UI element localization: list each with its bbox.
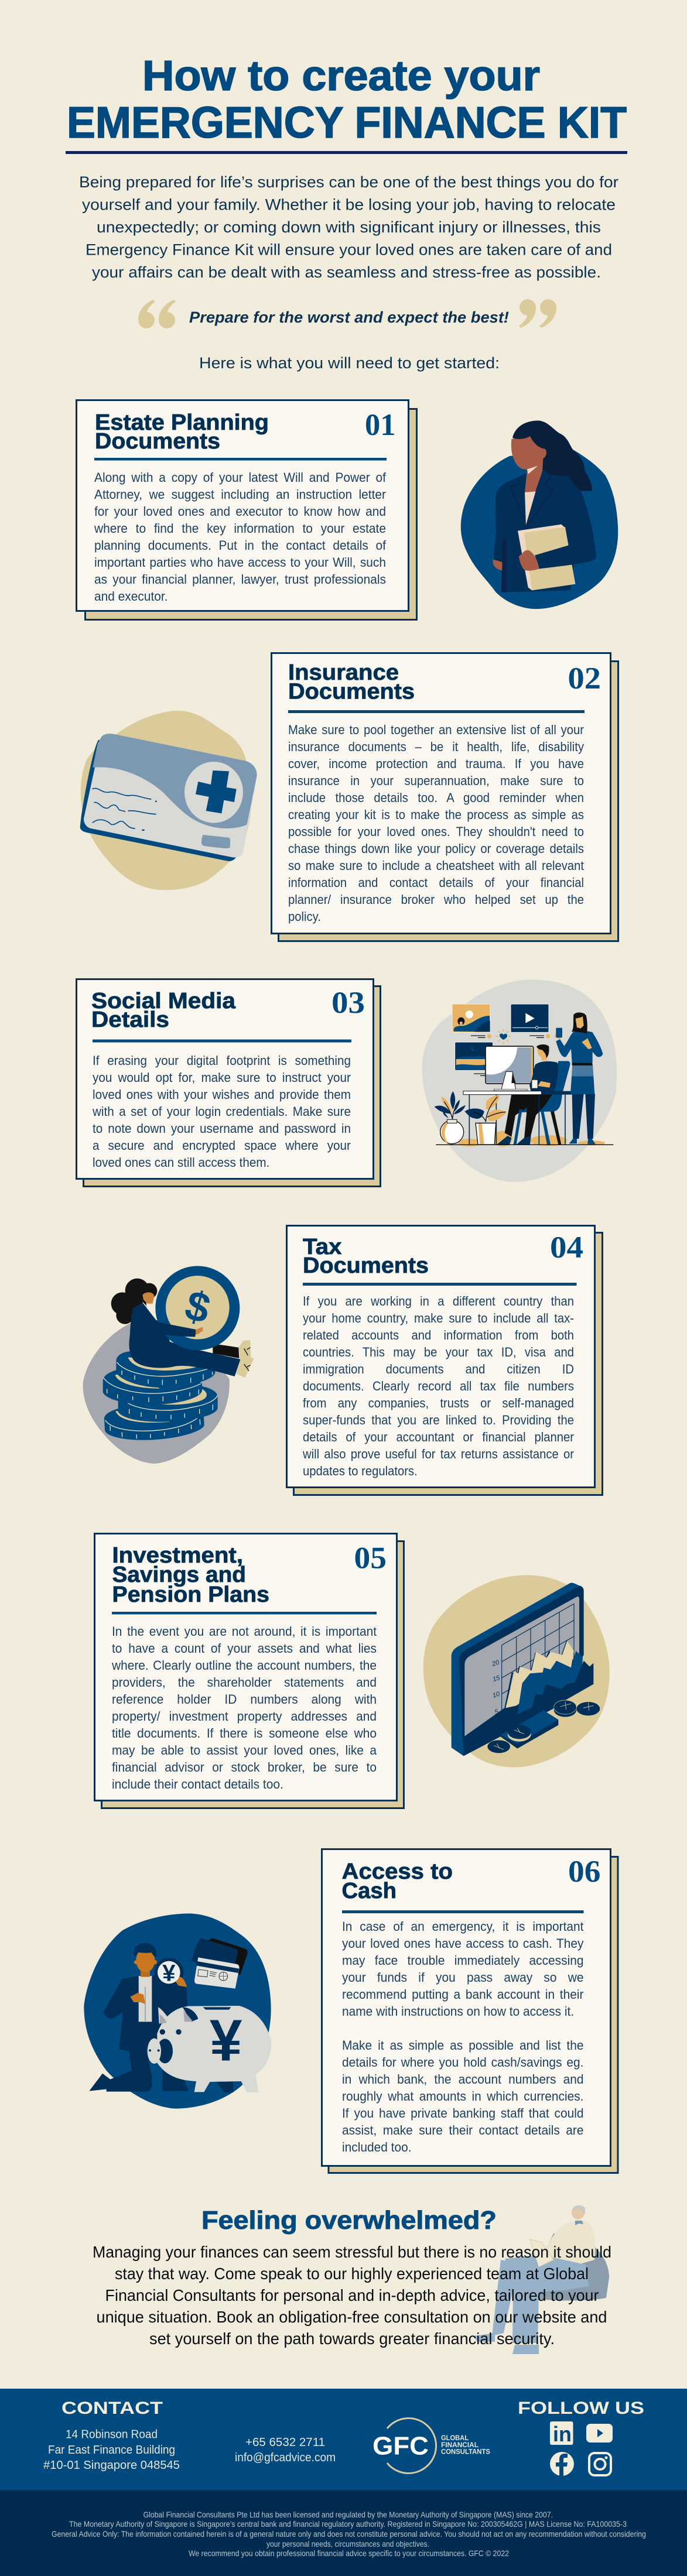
heading: tax documents: Documents — [303, 1253, 429, 1278]
illustration: stock chart monitor with coins — [423, 1575, 610, 1767]
text: insurance body: planner/ insurance broker who helped set up the — [288, 892, 584, 907]
text: access to cash body: details for where you hold cash/savings eg. — [342, 2055, 583, 2070]
arm — [134, 1308, 196, 1337]
text: tax body: updates to regulators. — [303, 1464, 418, 1478]
text: tax body — [303, 1294, 574, 1478]
intro paragraph: Emergency Finance Kit will ensure your loved ones are taken care of and — [86, 241, 612, 259]
text: investment body: include their contact details too. — [112, 1777, 283, 1791]
text: estate planning body: and executor. — [94, 589, 168, 604]
text: investment body: may be able to assist your loved ones, like a — [112, 1743, 377, 1758]
text: estate planning body: where to find the key information to your estate — [94, 521, 386, 536]
text: social media body: you would opt for, make sure to instruct your — [93, 1070, 351, 1084]
illustration: seated older man reading (faded) — [473, 2205, 609, 2354]
intro paragraph: unexpectedly; or coming down with significant injury or illnesses, this — [97, 218, 601, 236]
title: EMERGENCY FINANCE KIT — [67, 98, 627, 147]
text: estate planning body — [94, 470, 386, 604]
heading: insurance documents: Documents — [288, 679, 415, 704]
illustration: health insurance card — [80, 711, 257, 890]
text: insurance body: possible for your loved ones. They shouldn't need to — [288, 824, 584, 839]
heading: insurance documents — [288, 660, 415, 704]
closing paragraph: set yourself on the path towards greater financial security. — [149, 2330, 555, 2348]
footer: address: 14 Robinson Road — [66, 2428, 158, 2441]
text: insurance body — [288, 722, 584, 924]
heading: access to cash: Cash — [342, 1879, 397, 1903]
heading: investment savings and pension plans: Investment, — [112, 1543, 243, 1568]
heading: feeling overwhelmed: Feeling overwhelmed? — [201, 2206, 497, 2235]
text: tax body: your home country, make sure to include all tax- — [303, 1311, 574, 1325]
text: insurance body: information and contact details of your financial — [288, 875, 584, 890]
number 01: 01 — [365, 408, 396, 442]
text: insurance body: Make sure to pool together an extensive list of all your — [288, 722, 584, 737]
subheading: what you will need: Here is what you will need to get started: — [199, 354, 500, 372]
plants — [435, 1091, 507, 1145]
desk — [463, 1089, 572, 1145]
title — [67, 53, 627, 147]
monitor: 20 — [491, 1659, 501, 1668]
text: tax body: will also prove useful for tax returns assistance or — [303, 1447, 574, 1461]
illustration: businesswoman holding folder — [461, 420, 618, 609]
text: tax body: documents. Clearly record all tax file numbers — [303, 1379, 574, 1393]
footer: legal band: We recommend you obtain professional financial advice specific to your circumstances. GFC © 2022 — [189, 2548, 509, 2558]
number 05: 05 — [354, 1541, 387, 1575]
footer: address — [43, 2428, 180, 2472]
text: estate planning body: as your financial planner, lawyer, trust professionals — [94, 572, 386, 587]
text: tax body: countries. This may be your tax ID, visa and — [303, 1345, 574, 1359]
heading: tax documents — [303, 1235, 429, 1278]
text: estate planning body: Along with a copy of your latest Will and Power of — [94, 470, 386, 485]
icon: Facebook — [550, 2452, 574, 2476]
text: social media body: If erasing your digital footprint is something — [93, 1053, 351, 1068]
text: social media body — [93, 1053, 351, 1170]
footer: phone and email: +65 6532 2711 — [245, 2436, 325, 2449]
icon: closing quote mark — [519, 299, 556, 328]
monitor — [452, 1582, 584, 1756]
logo: GFC: FINANCIAL — [441, 2442, 478, 2449]
yen coin — [158, 1960, 180, 1986]
footer: legal band: your personal needs, circumstances and objectives. — [266, 2539, 429, 2548]
coins — [487, 1700, 600, 1753]
intro paragraph: your affairs can be dealt with as seamless and stress-free as possible. — [92, 263, 601, 281]
logo: GFC: CONSULTANTS — [441, 2448, 490, 2455]
text: investment body: reference holder ID numbers along with — [112, 1692, 377, 1707]
computer monitor — [486, 1046, 534, 1090]
text: insurance body: chase things down like your policy or coverage details — [288, 841, 584, 856]
text: tax body: immigration documents and citizen ID — [303, 1362, 574, 1376]
text: social media body: loved ones can still access them. — [93, 1155, 269, 1170]
text: estate planning body: for your loved ones and executor to know how and — [94, 504, 386, 519]
title: How to create your — [142, 53, 540, 100]
big dollar coin — [155, 1266, 240, 1350]
text: tax body: from any companies, trusts or self-managed — [303, 1396, 574, 1410]
text: investment body: to have a count of your assets and what lies — [112, 1641, 377, 1656]
text: insurance body: so make sure to include a cheatsheet with all relevant — [288, 858, 584, 873]
text: investment body: property/ investment property addresses and — [112, 1709, 377, 1724]
panel: 06 access to cash — [321, 1848, 618, 2174]
intro paragraph — [79, 173, 618, 281]
closing paragraph: stay that way. Come speak to our highly experienced team at Global — [115, 2265, 589, 2283]
third coin — [118, 1383, 218, 1422]
text: insurance body: include those details too. A good reminder when — [288, 790, 584, 805]
closing paragraph: Managing your finances can seem stressful but there is no reason it should — [93, 2243, 611, 2261]
heading: investment savings and pension plans — [112, 1543, 269, 1607]
panel: 01 estate planning documents — [76, 399, 418, 621]
footer: legal band: Global Financial Consultants Pte Ltd has been licensed and regulated by the Monetary Authority of Singapore (MAS) since 2007. — [143, 2510, 553, 2519]
text: social media body: with a set of your login credentials. Make sure — [93, 1104, 351, 1118]
text: access to cash body: your funds if you pass away so we — [342, 1970, 583, 1985]
second coin — [103, 1368, 202, 1405]
text: investment body: financial advisor or stock broker, be sure to — [112, 1760, 377, 1775]
man — [89, 1943, 233, 2092]
heading: social media details: Social Media — [91, 989, 236, 1013]
footer: address: Far East Finance Building — [48, 2444, 175, 2457]
stand — [501, 1711, 558, 1749]
trouser and leg — [213, 1344, 239, 1358]
text: access to cash body — [342, 1919, 583, 2154]
intro paragraph: Being prepared for life’s surprises can be one of the best things you do for — [79, 173, 618, 191]
icon: YouTube — [586, 2424, 613, 2443]
bottom coin — [104, 1400, 205, 1442]
heading: investment savings and pension plans: Savings and — [112, 1563, 246, 1587]
text: access to cash body: in which bank, the account numbers and — [342, 2072, 583, 2087]
heading: estate planning documents — [95, 410, 269, 454]
text: insurance body: policy. — [288, 909, 321, 924]
text: access to cash body: assist, make sure their contact details are — [342, 2123, 583, 2137]
top coin — [116, 1351, 215, 1388]
text: access to cash body: your loved ones have access to cash. They — [342, 1936, 583, 1951]
panel: 05 investment savings and pension plans — [94, 1533, 405, 1809]
video post — [511, 1004, 549, 1032]
heading: estate planning documents: Documents — [95, 429, 220, 454]
heading: tax documents: Tax — [303, 1235, 342, 1259]
text: investment body: where. Clearly outline the account numbers, the — [112, 1658, 377, 1673]
text: access to cash body: roughly what amounts in which currencies. — [342, 2089, 583, 2104]
text: investment body: In the event you are not around, it is important — [112, 1624, 377, 1639]
illustration: woman hugging dollar coin on coin stack: $ — [180, 1282, 215, 1332]
night post — [455, 1042, 493, 1070]
text: access to cash body: If you have private banking staff that could — [342, 2106, 583, 2121]
text: estate planning body: planning documents. Put in the contact details of — [94, 538, 386, 553]
logo: GFC: GFC — [372, 2432, 429, 2461]
panel: 04 tax documents — [286, 1225, 603, 1496]
illustration: woman hugging dollar coin on coin stack — [83, 1266, 254, 1464]
monitor: 10 — [492, 1690, 501, 1700]
chart areas — [505, 1641, 593, 1719]
closing paragraph: Financial Consultants for personal and in-depth advice, tailored to your — [105, 2286, 599, 2304]
closing paragraph — [93, 2243, 611, 2348]
text: insurance body: insurance documents – be it health, life, disability — [288, 739, 584, 754]
heading: insurance documents: Insurance — [288, 660, 399, 685]
text: insurance body: creating your kit is to make the process as simple as — [288, 807, 584, 822]
callout: prepare for the worst: Prepare for the worst and expect the best! — [189, 309, 509, 326]
number 04: 04 — [550, 1231, 583, 1265]
number 03: 03 — [331, 986, 365, 1020]
seated man — [497, 1044, 570, 1145]
icon: opening quote mark — [138, 300, 176, 328]
heading: social media details: Details — [91, 1008, 169, 1032]
text: social media body: a secure and encrypted space where your — [93, 1138, 351, 1152]
text: investment body: title documents. If there is someone else who — [112, 1726, 377, 1741]
text: estate planning body: Attorney, we suggest including an instruction letter — [94, 487, 386, 502]
footer: phone and email: info@gfcadvice.com — [235, 2451, 336, 2464]
text: access to cash body: name with instructions on how to access it. — [342, 2004, 574, 2019]
footer: phone and email — [235, 2436, 336, 2464]
text: investment body — [112, 1624, 377, 1791]
text: insurance body: cover, income protection and trauma. If you have — [288, 756, 584, 771]
heading: investment savings and pension plans: Pension Plans — [112, 1582, 269, 1607]
text: access to cash body: may face trouble immediately accessing — [342, 1953, 583, 1968]
text: tax body: super-funds that you are linked to. Providing the — [303, 1413, 574, 1427]
monitor: 15 — [492, 1674, 501, 1683]
standing woman — [555, 1012, 603, 1144]
text: investment body: providers, the shareholder statements and — [112, 1675, 377, 1690]
logo: GFC: GLOBAL — [441, 2435, 469, 2442]
photo post — [452, 1004, 490, 1032]
number 06: 06 — [568, 1855, 601, 1889]
panel: 03 social media details — [76, 978, 381, 1187]
illustration: couple at desk with social media posts — [422, 979, 617, 1182]
heading: access to cash — [342, 1859, 453, 1903]
text: tax body: details of your accountant or financial planner — [303, 1430, 574, 1444]
number 02: 02 — [568, 662, 601, 696]
text: tax body: If you are working in a different country than — [303, 1294, 574, 1308]
heading: access to cash: Access to — [342, 1859, 453, 1884]
icon: LinkedIn: in — [553, 2422, 572, 2446]
text: access to cash body: Make it as simple as possible and list the — [342, 2038, 583, 2053]
piggy bank: ¥ — [210, 2008, 242, 2073]
footer: legal band — [0, 2490, 687, 2576]
black hair — [111, 1279, 157, 1324]
footer: address: #10-01 Singapore 048545 — [43, 2459, 180, 2472]
heading: social media details — [91, 989, 236, 1032]
bank cards — [192, 1938, 248, 1989]
panel: 02 insurance documents — [271, 652, 619, 942]
text: insurance body: insurance in your superannuation, make sure to — [288, 773, 584, 788]
closing paragraph: unique situation. Book an obligation-free consultation on our website and — [96, 2308, 607, 2326]
footer: contact band — [0, 2389, 687, 2490]
logo: GFC — [372, 2418, 490, 2474]
text: access to cash body: included too. — [342, 2140, 412, 2154]
piggy bank — [148, 2006, 271, 2092]
text: access to cash body: recommend putting a bank account in their — [342, 1987, 583, 2002]
text: social media body: loved ones with your wishes and provide them — [93, 1087, 351, 1102]
yen coin: ¥ — [162, 1960, 176, 1986]
text: access to cash body: In case of an emergency, it is important — [342, 1919, 583, 1934]
text: social media body: to note down your username and password in — [93, 1121, 351, 1136]
monitor: 5 — [494, 1708, 500, 1716]
footer: follow us heading: FOLLOW US — [518, 2399, 644, 2418]
icon: Instagram — [589, 2453, 611, 2475]
heading: estate planning documents: Estate Planning — [95, 410, 269, 435]
illustration: man with yen coin and piggy bank — [84, 1913, 271, 2109]
text: estate planning body: important parties who have access to your Will, such — [94, 555, 386, 570]
text: tax body: related accounts and information from both — [303, 1328, 574, 1342]
footer: legal band: The Monetary Authority of Singapore is Singapore’s central bank and financial regulatory authority. Registered in Singapore No: 200305462G | MAS License No: FA100035-3 — [69, 2519, 627, 2529]
footer: contact heading: CONTACT — [61, 2399, 163, 2418]
intro paragraph: yourself and your family. Whether it be losing your job, having to relocate — [82, 196, 616, 213]
